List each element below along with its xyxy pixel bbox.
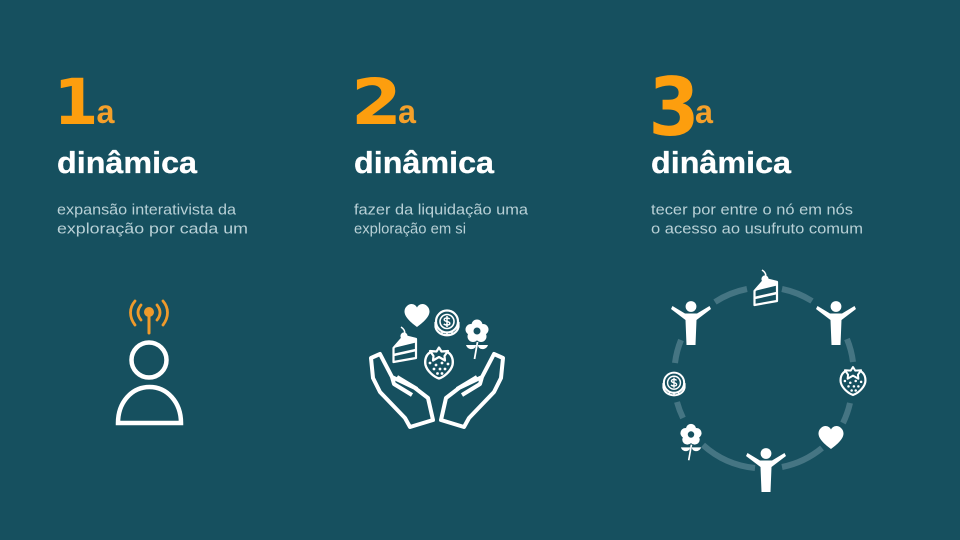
icon: antenna signal <box>130 301 168 333</box>
icon: person top right <box>816 301 856 345</box>
text block: description 1: exploração por cada um <box>57 220 248 238</box>
heading number: 2a: 2 <box>351 66 402 139</box>
icon: right hand <box>441 354 503 427</box>
icon: coin <box>436 310 458 336</box>
icon: cake <box>754 270 777 305</box>
heading number: 3a: 3 <box>648 61 700 154</box>
icon: coin <box>663 373 685 396</box>
text block: description 3 <box>651 202 863 238</box>
icon: person top left <box>671 301 711 345</box>
icon: heart <box>818 426 844 449</box>
text block: description 3: o acesso ao usufruto comum <box>651 220 863 238</box>
icon: person outline <box>118 342 181 423</box>
heading number: 1a: a <box>96 93 115 130</box>
icon: flower <box>466 320 488 359</box>
icon: left hand <box>371 354 433 427</box>
heading: dinâmica: dinâmica <box>651 145 792 180</box>
icon: hands holding goods <box>371 304 503 427</box>
text block: description 3: tecer por entre o nó em nós <box>651 202 853 218</box>
icon: cake <box>394 327 416 362</box>
heading number: 2a: a <box>398 93 417 130</box>
panel: 2a dinâmica <box>351 66 529 427</box>
text block: description 1 <box>57 202 248 238</box>
icon: strawberry <box>841 367 865 395</box>
heading number: 2a <box>351 66 417 139</box>
icon: person bottom <box>746 448 786 492</box>
heading number: 3a: a <box>695 93 714 130</box>
panel: 1a dinâmica <box>54 66 248 423</box>
icon: person with antenna <box>118 301 181 423</box>
panel: 3a dinâmica <box>648 61 865 492</box>
text block: description 2 <box>354 202 529 238</box>
text block: description 1: expansão interativista da <box>57 202 237 218</box>
ring arcs <box>675 289 853 468</box>
heading number: 1a: 1 <box>54 66 98 139</box>
icon: strawberry <box>425 348 453 378</box>
icon: flower <box>680 424 702 460</box>
text block: description 2: fazer da liquidação uma <box>354 202 529 218</box>
icon: heart <box>404 304 430 327</box>
heading: dinâmica: dinâmica <box>354 145 495 180</box>
chart: ring of people and goods <box>663 270 865 492</box>
heading: dinâmica: dinâmica <box>57 145 198 180</box>
text block: description 2: exploração em si <box>354 220 466 238</box>
